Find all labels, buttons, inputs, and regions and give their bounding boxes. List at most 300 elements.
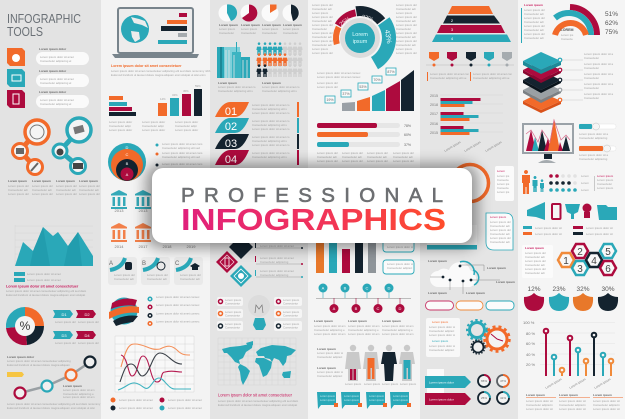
panel: alphabet timeline	[314, 284, 414, 336]
vertical bars	[316, 240, 376, 273]
growth label values: 19%	[326, 98, 334, 102]
half ring text: Lorem ipsum dol	[524, 32, 545, 36]
numbered ribbons: D4	[84, 333, 90, 338]
radial text columns: Lorem ipsum dol	[396, 31, 417, 35]
timeline text columns: Consectetur adipiscing e	[382, 328, 413, 332]
figures text: Lorem ipsum dolor si	[317, 370, 343, 374]
caption columns: Lorem ipsum	[8, 179, 27, 183]
title: professional: PROFESSIONAL	[181, 184, 443, 207]
half ring text: Consectetur adi	[524, 12, 544, 16]
top nodes	[318, 284, 394, 292]
hexagon numbers: 4	[591, 256, 597, 267]
radial text columns: Lorem ipsum	[396, 47, 413, 51]
diamond text rows: Lorem ipsum dolor sit amet	[260, 256, 294, 260]
stack labels: Consectetur	[584, 86, 599, 90]
gear note: Lorem ipsum dolor si	[429, 325, 455, 329]
laptop caption	[111, 64, 211, 77]
progress captions: Lorem ipsum dol	[393, 159, 414, 163]
banner 02: Lorem ipsum dolor sit amet co	[252, 127, 290, 131]
gear note: Lorem ipsum dolor si	[429, 344, 455, 348]
panel: vertical bars and outlined notes	[316, 240, 414, 274]
white note card: Lorem ips	[497, 190, 510, 194]
teal circle cluster	[53, 118, 91, 174]
cloud diagram: Lorem ipsum	[496, 280, 515, 284]
lollipop captions: Consectetur adipiscin	[526, 403, 553, 407]
outlined note text	[387, 245, 413, 270]
pictogram captions	[218, 81, 300, 93]
panel: ABC icon cards	[108, 257, 203, 285]
pie captions	[219, 23, 302, 35]
lollipop axis: 80 %	[526, 331, 536, 336]
people icons	[522, 170, 544, 194]
area chart	[15, 225, 93, 266]
tool text rows	[36, 47, 89, 108]
radial chart: Lorem	[352, 32, 368, 38]
bubble 4: Lorem ipsum	[393, 398, 408, 402]
card B: Consectetur adi	[147, 277, 167, 281]
chart captions: Lorem ipsum dolor	[175, 120, 198, 124]
area chart legend: Lorem ipsum dolor sit amet	[27, 272, 61, 276]
lollipop captions: Lorem ipsum	[559, 393, 578, 397]
half ring label: Consecte	[561, 37, 573, 41]
tool text rows: Consectetur adipiscing el	[40, 59, 72, 63]
card A: Consectetur adi	[114, 277, 134, 281]
nested circle diagram: B	[126, 161, 129, 166]
figure one	[345, 345, 361, 381]
radial text columns: Consectetur adi	[396, 19, 416, 23]
hexagon numbers: 1	[563, 256, 569, 267]
banner 03: 03	[225, 138, 237, 150]
gear note: Lorem ipsum	[432, 339, 449, 343]
numbered ribbons: Lorem ipsum dol	[55, 320, 76, 324]
hexagon note: Consectetur adi	[525, 255, 545, 259]
bulb side labels: Lorem ipsum	[225, 322, 242, 326]
panel: connected circle icons	[8, 118, 100, 196]
area chart legend: Lorem ipsum dolor sit amet	[27, 278, 61, 282]
timeline captions: Consectetur adipiscing e	[63, 392, 94, 396]
area chart caption: Lorem ipsum dolor sit amet consectetuer	[6, 284, 79, 288]
hexagon numbers	[563, 247, 611, 275]
year labels	[115, 208, 196, 249]
radial text columns: Consectetur adi	[396, 7, 416, 11]
bulb	[248, 295, 270, 330]
dot labels: Lorem	[581, 181, 590, 185]
lollipop axis: 40 %	[526, 352, 536, 357]
shield captions: Lorem ipsum dolor sit amet con	[473, 72, 512, 76]
timeline intro text	[7, 355, 71, 367]
banner 03	[215, 134, 299, 150]
bubble 1: Lorem ipsum	[320, 394, 335, 398]
figures text: Lorem ipsum	[317, 347, 336, 351]
column chart: 34%	[172, 93, 178, 97]
figures text	[317, 347, 343, 378]
pie captions: Lorem ipsum	[283, 23, 302, 27]
white note card: Lorem ips	[497, 182, 510, 186]
banner 04: Consectetur adipiscing elit s	[252, 155, 287, 159]
stack labels: Consectetur	[584, 96, 599, 100]
bulb side labels: Consectetur	[283, 302, 298, 306]
bottom nodes: D	[399, 306, 402, 311]
hexagon cluster	[558, 244, 616, 275]
panel: half rings	[521, 3, 618, 43]
icon: orange chart tile	[7, 48, 25, 66]
radial chart: 43%	[383, 29, 392, 44]
panel: infographic tools	[7, 12, 89, 108]
radial chart: 37%	[361, 15, 374, 24]
white note card: Lorem ips	[497, 174, 510, 178]
temples row one	[111, 190, 151, 209]
timeline text columns: Consectetur adipiscing e	[314, 328, 345, 332]
growth label values: 53%	[359, 85, 367, 89]
stack labels: Lorem ipsum dolor sit a	[584, 62, 614, 66]
caption columns: Consectetur adi	[79, 188, 99, 192]
stack layers	[523, 52, 561, 113]
panel: speech bubbles	[317, 392, 411, 409]
icon: megaphone	[527, 202, 545, 220]
chart legend: Lorem ipsum dolor sit amet	[168, 398, 202, 402]
panel: lollipop chart	[523, 320, 623, 411]
progress captions: Lorem ipsum dol	[367, 151, 388, 155]
pie captions: Lorem ipsum	[283, 27, 300, 31]
growth label values: 37%	[342, 92, 350, 96]
gear note: Lorem ipsum	[432, 320, 449, 324]
shield captions: Consectetur adipiscing elit se	[473, 76, 510, 80]
timeline intro text: Euismod tincidunt ut laoreet dolore magna aliquam	[7, 363, 71, 367]
panel: hexagons	[522, 244, 616, 278]
title card shadow	[146, 164, 478, 248]
sphere list	[148, 295, 200, 325]
striped rows with teal bar	[427, 225, 477, 250]
caption columns: Lorem ipsum dol	[8, 184, 29, 188]
stack labels: Consectetur	[584, 66, 599, 70]
figure labels: Lorem ipsum	[364, 382, 381, 386]
stack labels: Lorem ipsum dolor sit a	[584, 52, 614, 56]
panel: cards and cloud	[425, 213, 515, 405]
white note card: Consecte	[497, 178, 509, 182]
timeline connector	[20, 362, 90, 393]
radial text columns: Lorem ipsum dol	[312, 3, 333, 7]
half ring chart	[555, 7, 597, 35]
pie charts	[218, 4, 300, 22]
outlined note	[486, 213, 513, 250]
bulb side labels: Consectetur	[283, 314, 298, 318]
hexagon note: Consectetur adi	[525, 271, 545, 275]
diamond text rows	[255, 243, 303, 278]
bubble 1	[317, 392, 338, 409]
timeline intro text: Lorem ipsum dolor sit amet consectetuer adipiscing	[7, 359, 71, 363]
timeline captions: Lorem ipsum dolor sit amet consectetuer adipiscing elit sed diam nonummy	[7, 402, 101, 406]
timeline text columns: Lorem ipsum dolor sit am	[314, 324, 346, 328]
bubble 3: Lorem ipsum	[369, 398, 384, 402]
half ring percentages	[605, 11, 618, 36]
banner 04: Lorem ipsum dolor sit amet co	[252, 151, 290, 155]
caption columns: Lorem ipsum	[32, 179, 51, 183]
figure labels: Lorem ipsum	[400, 382, 417, 386]
numbered ribbons: D2	[84, 312, 90, 317]
radial text columns: Lorem ipsum	[396, 11, 413, 15]
rotated axis labels	[444, 140, 503, 153]
bubble 3: Lorem ipsum	[369, 394, 384, 398]
area chart legend	[14, 272, 61, 282]
orange circle cluster	[12, 120, 49, 174]
year labels: 2013	[115, 208, 124, 213]
tool text rows: Lorem ipsum dolor	[39, 69, 67, 73]
pyramid chart: 2	[451, 18, 454, 23]
title: infographics: INFOGRAPHICS	[181, 203, 446, 237]
year labels: 2017	[139, 244, 148, 249]
radial text columns: Consectetur adi	[396, 43, 416, 47]
pie captions: Lorem ipsum	[262, 27, 279, 31]
half ring percentages: 62%	[605, 20, 618, 27]
hexagon note: Lorem ipsum dol	[525, 267, 546, 271]
tool text rows: Lorem ipsum dolor sit amet	[40, 55, 74, 59]
progress values: 37%	[404, 143, 411, 147]
year axis labels: 2017	[430, 112, 438, 116]
chart captions: Consectetur adipi	[109, 124, 131, 128]
dot labels	[581, 174, 614, 192]
outlined note: Consectetur adi	[490, 232, 510, 236]
lollipop labels: Lorem ipsum	[594, 377, 612, 390]
stack knobs	[558, 58, 562, 102]
outlined note: Lorem ipsum dol	[490, 228, 511, 232]
top nodes: D	[388, 286, 391, 290]
numbered ribbons: Lorem ipsum dol	[78, 341, 99, 345]
caption columns: Consectetur adi	[8, 188, 28, 192]
chart legend: Lorem ipsum dolor sit amet	[168, 406, 202, 410]
radial text columns: Lorem ipsum dol	[312, 23, 333, 27]
numbered ribbons: D3	[61, 333, 67, 338]
nested circle diagram: D	[126, 145, 129, 150]
gear note: Consectetur adipisci	[429, 329, 455, 333]
numbered ribbons	[53, 310, 99, 345]
radial text columns: Consectetur adi	[312, 35, 332, 39]
radial text columns: Lorem ipsum dol	[396, 51, 417, 55]
shield captions	[427, 72, 512, 81]
sliders: Lorem ipsum dolor sit a	[579, 153, 609, 157]
people pictogram	[256, 42, 303, 77]
line series	[118, 344, 191, 390]
dot labels: Lorem ipsum	[597, 186, 614, 190]
map caption: Euismod tincidunt ut laoreet dolore magna aliquam erat volutpat	[218, 403, 297, 407]
progress captions	[317, 151, 414, 163]
dot labels: Lorem ipsum	[597, 174, 614, 178]
lollipop captions: Lorem ipsum dolor sit	[593, 399, 620, 403]
timeline text columns: Lorem ipsum dolor sit am	[348, 332, 380, 336]
radial text columns: Lorem ipsum dol	[396, 15, 417, 19]
caption columns: Lorem ipsum dol	[32, 192, 53, 196]
figure labels: Lorem ipsum	[345, 382, 362, 386]
timeline text columns: Lorem ipsum dolor sit am	[382, 324, 414, 328]
timeline stems	[323, 288, 389, 298]
percent arcs	[484, 375, 509, 398]
tool text rows: Consectetur adipiscing el	[40, 81, 72, 85]
bubble 2	[341, 392, 362, 409]
icon: teal laptop tile	[7, 69, 25, 87]
timeline captions: Lorem ipsum dolor sit am	[63, 395, 95, 399]
lollipop captions: Lorem ipsum dolor sit	[526, 407, 553, 411]
card A: Lorem ipsum dol	[114, 273, 135, 277]
numbered ribbons: D1	[61, 312, 67, 317]
bulb side labels	[217, 297, 302, 331]
icon legend	[523, 226, 613, 236]
panel: progress bars	[317, 123, 414, 163]
column chart: 45%	[183, 89, 189, 93]
gear note: Lorem ipsum dolor si	[429, 333, 455, 337]
card B: B	[142, 261, 146, 267]
lollipop captions: Consectetur adipiscin	[559, 403, 586, 407]
rotated axis labels: Lorem ipsum	[484, 140, 503, 153]
banner 01: Consectetur adipiscing elit s	[252, 107, 287, 111]
progress captions: Lorem ipsum dol	[393, 151, 414, 155]
radial text columns: Lorem ipsum	[312, 47, 329, 51]
timeline text columns: Lorem ipsum dolor sit am	[314, 332, 346, 336]
shield captions: Lorem ipsum dolor sit amet con	[430, 72, 469, 76]
bottom nodes: C	[377, 306, 380, 311]
year labels: 2019	[187, 244, 196, 249]
caption columns: Lorem ipsum dol	[56, 184, 77, 188]
panel: nested circles	[108, 142, 203, 249]
gear note: Consectetur adipisci	[429, 348, 455, 352]
pie captions: Lorem ipsum	[262, 23, 281, 27]
laptop caption: Lorem ipsum dolor sit amet consectetuer adipiscing elit sed diam nonummy nibh	[111, 69, 211, 73]
figure four	[399, 345, 415, 381]
line chart grid	[115, 336, 194, 392]
caption columns: Lorem ipsum dol	[79, 192, 100, 196]
nested circle legend	[156, 142, 203, 166]
figures text: Consectetur adipisci	[317, 355, 343, 359]
tool text rows: Lorem ipsum dolor	[39, 90, 67, 94]
card C: Lorem ipsum dol	[180, 273, 201, 277]
banner 02	[215, 118, 299, 133]
nested circle diagram: A	[126, 172, 129, 177]
diamond text rows: Consectetur adipiscing	[260, 260, 289, 264]
sliders: Lorem ipsum dolor sit a	[579, 132, 609, 136]
lollipop captions: Lorem ipsum dolor sit	[559, 399, 586, 403]
radial text columns: Lorem ipsum dol	[312, 51, 333, 55]
figure three	[381, 345, 397, 381]
outlined note: Lorem ipsum dol	[490, 236, 511, 240]
half ring label	[561, 28, 574, 41]
lollipop sticks	[544, 329, 613, 376]
outlined note: Lorem ipsum	[490, 215, 507, 219]
radial text columns: Consectetur adi	[312, 19, 332, 23]
globe	[121, 15, 149, 43]
icon legend: Lorem ipsum dolor sit	[535, 232, 562, 236]
timeline axis	[316, 298, 411, 300]
panel: striped sphere	[109, 295, 200, 326]
percent values: 23%	[552, 286, 566, 293]
growth chart text: Lorem ipsum dol	[317, 81, 338, 85]
laptop base	[112, 54, 199, 58]
half ring text: Lorem ipsum dol	[524, 24, 545, 28]
timeline intro text: Lorem ipsum dolor	[7, 355, 35, 359]
stack labels: Consectetur	[584, 76, 599, 80]
timeline captions: Lorem ipsum	[63, 384, 82, 388]
hexagon numbers: 2	[577, 247, 583, 258]
panel: bulb	[217, 295, 302, 331]
pie captions: Lorem ipsum	[241, 23, 260, 27]
yellow tag	[7, 372, 24, 377]
hexagon numbers: 6	[605, 264, 611, 275]
lollipop captions: Lorem ipsum dolor sit	[593, 407, 620, 411]
hexagon note: Lorem ipsum dol	[525, 251, 546, 255]
card C: Consectetur adi	[180, 277, 200, 281]
heading: infographic tools: INFOGRAPHIC	[7, 12, 81, 26]
half ring text: Consectetur adi	[524, 20, 544, 24]
panel: layered stack	[523, 52, 614, 113]
caption columns: Lorem ipsum dol	[8, 192, 29, 196]
top nodes: C	[366, 286, 369, 290]
year labels: 2014	[115, 244, 124, 249]
half ring percentages: 51%	[605, 11, 618, 18]
nested circle legend: Lorem ipsum dolor sit amet cons	[162, 162, 203, 166]
progress captions: Consectetur adi	[393, 155, 413, 159]
banner 03: Consectetur adipiscing elit s	[252, 139, 287, 143]
banner 02: Lorem ipsum dolor sit amet co	[252, 119, 290, 123]
panel: area chart	[6, 225, 93, 297]
icon: trophy	[565, 204, 580, 219]
screen bars	[158, 13, 187, 44]
bulb side labels: Lorem ipsum	[225, 298, 242, 302]
radial text columns: Lorem ipsum dol	[396, 39, 417, 43]
cloud diagram	[428, 259, 515, 295]
progress values	[404, 124, 411, 147]
pyramid chart	[432, 6, 511, 42]
progress captions: Lorem ipsum dol	[317, 159, 338, 163]
bubble 4: Lorem ipsum	[393, 394, 408, 398]
icon: crimson phone tile	[7, 90, 25, 108]
half ring text: Lorem ipsum dol	[524, 16, 545, 20]
lollipop labels: Lorem ipsum	[568, 377, 587, 390]
radial text columns: Consectetur adi	[312, 7, 332, 11]
panel: line chart	[110, 336, 202, 410]
cloud diagram: Lorem ipsum	[487, 266, 506, 270]
lollipop axis: 20 %	[526, 362, 536, 367]
pie captions: Lorem ipsum	[219, 23, 238, 27]
banner 01: Lorem ipsum dolor sit amet co	[252, 103, 290, 107]
nested circle legend: Consectetur adipiscing elit sed	[162, 146, 200, 150]
outlined note: Lorem ipsum dol	[490, 220, 511, 224]
card B	[141, 257, 170, 285]
card C	[174, 257, 203, 285]
white note card	[495, 166, 514, 201]
hexagon numbers: 3	[577, 264, 583, 275]
half ring text: Lorem ipsum dol	[524, 8, 545, 12]
outlined note: Consectetur adi	[490, 240, 510, 244]
stack labels: Consectetur	[584, 56, 599, 60]
lollipop axis	[523, 320, 615, 367]
nested circle legend: Lorem ipsum dolor sit amet cons	[162, 142, 203, 146]
banner 04: 04	[225, 154, 237, 166]
tool text rows: Lorem ipsum dolor sit amet	[40, 77, 74, 81]
year labels: 2013	[139, 208, 148, 213]
caption columns: Consectetur adi	[32, 188, 52, 192]
half ring text: Lorem ipsum	[524, 3, 543, 7]
radial chart: 25%	[339, 16, 353, 28]
hexagon note	[522, 245, 553, 278]
lollipop captions	[526, 393, 623, 411]
percent rings	[478, 375, 509, 404]
progress captions: Consectetur adi	[317, 155, 337, 159]
pie captions: Lorem ipsum	[241, 27, 258, 31]
year axis labels: 2015	[430, 94, 438, 98]
top nodes: A	[322, 286, 325, 290]
progress tracks	[317, 123, 400, 147]
laptop caption: Lorem ipsum dolor sit amet consectetuer	[111, 64, 182, 68]
growth label values: 70%	[373, 78, 381, 82]
sphere list: Lorem ipsum dolor sit amet consec	[156, 312, 200, 316]
progress values: 60%	[404, 133, 411, 137]
